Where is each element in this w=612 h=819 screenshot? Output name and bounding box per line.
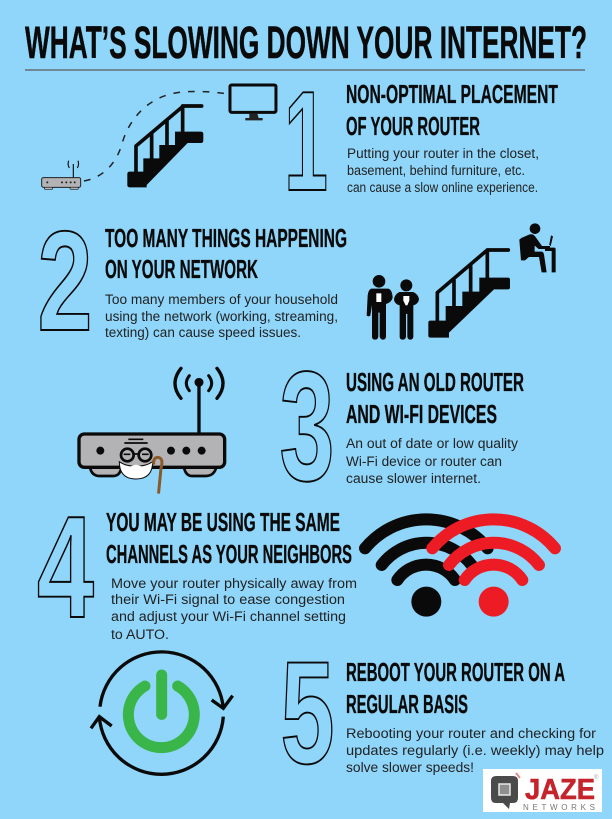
router body bbox=[79, 434, 225, 467]
text block 1: Putting your router in the closet, bbox=[347, 146, 539, 161]
text block 5: updates regularly (i.e. weekly) may help bbox=[346, 743, 604, 758]
icon: router with dashed signal path up the stairs to a monitor bbox=[42, 85, 276, 189]
text block 5 bbox=[346, 726, 604, 775]
number 1: 1 bbox=[284, 62, 328, 221]
icon: staircase bbox=[127, 106, 203, 187]
text block 2: texting) can cause speed issues. bbox=[105, 325, 301, 340]
text block 5: solve slower speeds! bbox=[346, 760, 474, 775]
logo icon: speech bubble bbox=[491, 776, 518, 809]
text block 4 bbox=[111, 576, 357, 642]
heading 1 bbox=[346, 79, 558, 141]
heading 3 bbox=[346, 367, 524, 429]
black reboot arrows bbox=[91, 652, 233, 774]
heading 1: OF YOUR ROUTER bbox=[346, 111, 480, 141]
number 2: 2 bbox=[38, 202, 92, 361]
arrow: dashed signal path bbox=[84, 91, 224, 181]
number 3: 3 bbox=[280, 340, 334, 514]
text block 3: cause slower internet. bbox=[346, 471, 481, 486]
text block 3 bbox=[346, 436, 518, 486]
heading 4: YOU MAY BE USING THE SAME bbox=[106, 507, 340, 537]
face with glasses and beard bbox=[119, 439, 153, 479]
router feet bbox=[90, 467, 216, 476]
icon: old router with glasses, beard and cane bbox=[79, 368, 225, 492]
logo wordmark: JAZE bbox=[525, 774, 595, 806]
heading 4: CHANNELS AS YOUR NEIGHBORS bbox=[106, 539, 352, 569]
text block 4: and adjust your Wi-Fi channel setting bbox=[111, 609, 346, 624]
text block 2 bbox=[105, 292, 338, 340]
heading 2: ON YOUR NETWORK bbox=[105, 254, 258, 284]
signal arcs and antenna bbox=[175, 368, 223, 433]
text block 1: basement, behind furniture, etc. bbox=[347, 163, 525, 178]
text block 1: can cause a slow online experience. bbox=[347, 180, 538, 195]
text block 2: using the network (working, streaming, bbox=[105, 309, 338, 324]
text block 2: Too many members of your household bbox=[105, 292, 338, 307]
number 4: 4 bbox=[37, 486, 94, 648]
icon: people, staircase and seated laptop user bbox=[367, 223, 556, 340]
text block 3: Wi-Fi device or router can bbox=[346, 454, 502, 469]
logo: JAZE Networks: ® bbox=[594, 774, 599, 781]
icon: staircase bbox=[428, 250, 510, 338]
heading 2 bbox=[105, 223, 347, 284]
heading 4 bbox=[106, 507, 352, 569]
text block 4: Move your router physically away from bbox=[111, 576, 357, 591]
router lights bbox=[96, 447, 206, 455]
text block 4: to AUTO. bbox=[111, 627, 169, 642]
text block 1 bbox=[347, 146, 539, 195]
heading 2: TOO MANY THINGS HAPPENING bbox=[105, 223, 347, 253]
text block 3: An out of date or low quality bbox=[346, 436, 518, 451]
icon: person at laptop bbox=[519, 223, 556, 272]
icon: overlapping black and red Wi-Fi symbols bbox=[365, 519, 555, 617]
icon: black Wi-Fi bbox=[365, 519, 488, 617]
icon: monitor bbox=[230, 85, 276, 120]
heading 5: REGULAR BASIS bbox=[346, 689, 468, 719]
icon: small router bbox=[42, 161, 81, 189]
text block 4: their Wi-Fi signal to ease congestion bbox=[111, 592, 345, 607]
number 5: 5 bbox=[280, 631, 334, 794]
icon: two people bbox=[367, 275, 419, 340]
logo: JAZE Networks: NETWORKS bbox=[523, 803, 595, 812]
logo: JAZE Networks bbox=[483, 769, 602, 812]
cane bbox=[154, 457, 162, 492]
heading 3: AND WI-FI DEVICES bbox=[346, 399, 497, 429]
icon: power symbol with circular reboot arrows bbox=[91, 652, 233, 774]
green power button bbox=[128, 675, 194, 748]
heading 5 bbox=[346, 657, 565, 719]
text block 5: Rebooting your router and checking for bbox=[346, 726, 597, 741]
icon: red Wi-Fi bbox=[432, 519, 555, 617]
